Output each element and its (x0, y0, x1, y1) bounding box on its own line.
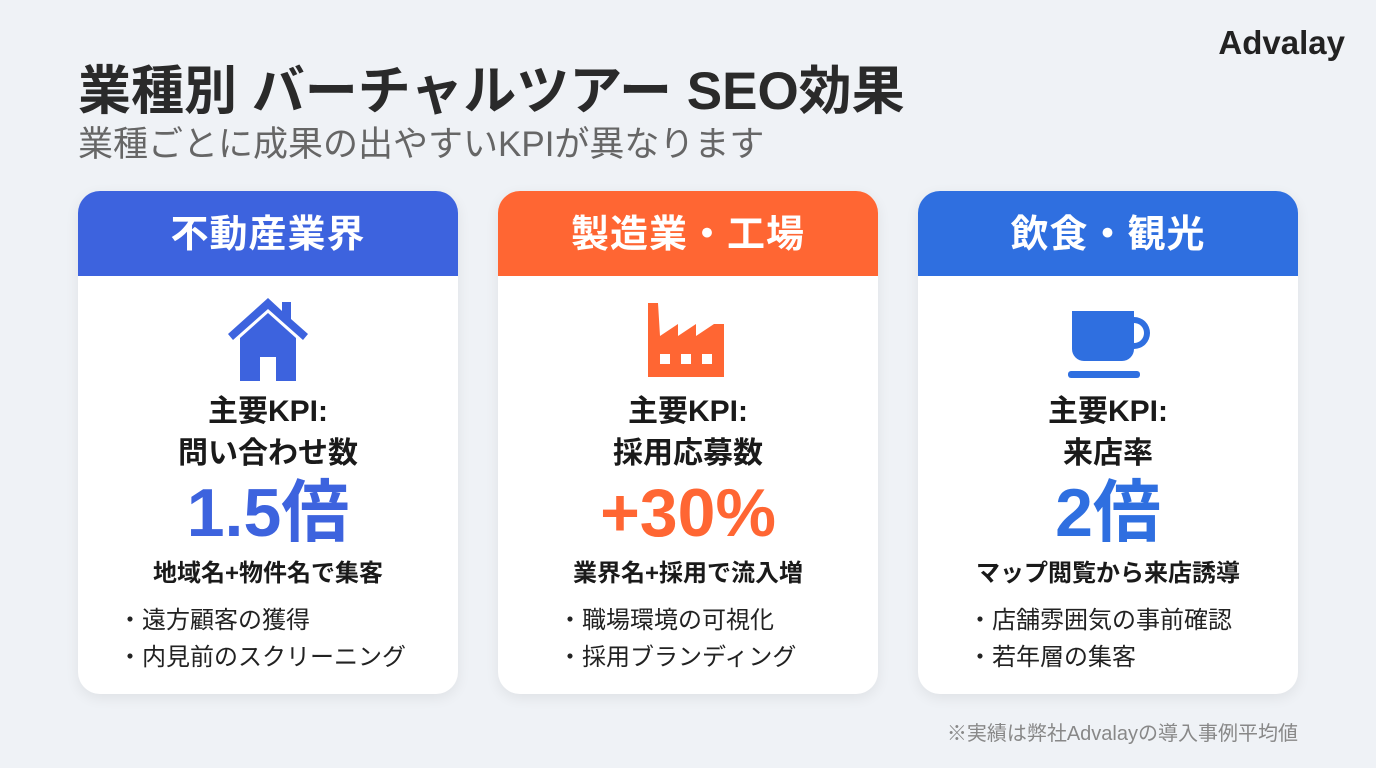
header (78, 191, 458, 276)
footnote: ※実績は弊社Advalayの導入事例平均値 (947, 723, 1298, 745)
bullets (118, 607, 406, 671)
icon: factory (648, 303, 724, 377)
title: 業種別 バーチャルツアー SEO効果 (78, 62, 905, 121)
method: 地域名+物件名で集客 (153, 560, 383, 587)
KPI (1048, 395, 1168, 470)
bullets (558, 607, 796, 671)
bullets: ・遠方顧客の獲得 (118, 607, 310, 634)
number: 1.5倍 (187, 475, 349, 551)
header: 飲食・観光 (1010, 214, 1206, 256)
header (498, 191, 878, 276)
panel: manufacturing (498, 191, 878, 694)
method: 業界名+採用で流入増 (573, 560, 803, 587)
panel: food & tourism (918, 191, 1298, 694)
header: 製造業・工場 (571, 214, 805, 256)
number: 2倍 (1055, 475, 1161, 551)
KPI: 主要KPI: (628, 395, 748, 428)
bullets: ・職場環境の可視化 (558, 607, 774, 634)
KPI (613, 395, 763, 470)
subtitle: 業種ごとに成果の出やすいKPIが異なります (78, 125, 764, 164)
bullets (968, 607, 1232, 671)
bullets: ・採用ブランディング (558, 644, 796, 671)
KPI: 主要KPI: (1048, 395, 1168, 428)
panel: real estate (78, 191, 458, 694)
KPI (178, 395, 358, 470)
KPI: 問い合わせ数 (178, 437, 358, 470)
logo: Advalay (1218, 24, 1345, 61)
bullets: ・若年層の集客 (968, 644, 1136, 671)
KPI: 来店率 (1063, 437, 1153, 470)
bullets: ・内見前のスクリーニング (118, 644, 406, 671)
icon: house (228, 298, 308, 381)
bullets: ・店舗雰囲気の事前確認 (968, 607, 1232, 634)
header: 不動産業界 (170, 214, 366, 256)
header (918, 191, 1298, 276)
icon: cup (1068, 311, 1150, 378)
method: マップ閲覧から来店誘導 (976, 560, 1240, 587)
KPI: 主要KPI: (208, 395, 328, 428)
number: +30% (600, 475, 776, 551)
KPI: 採用応募数 (613, 437, 763, 470)
